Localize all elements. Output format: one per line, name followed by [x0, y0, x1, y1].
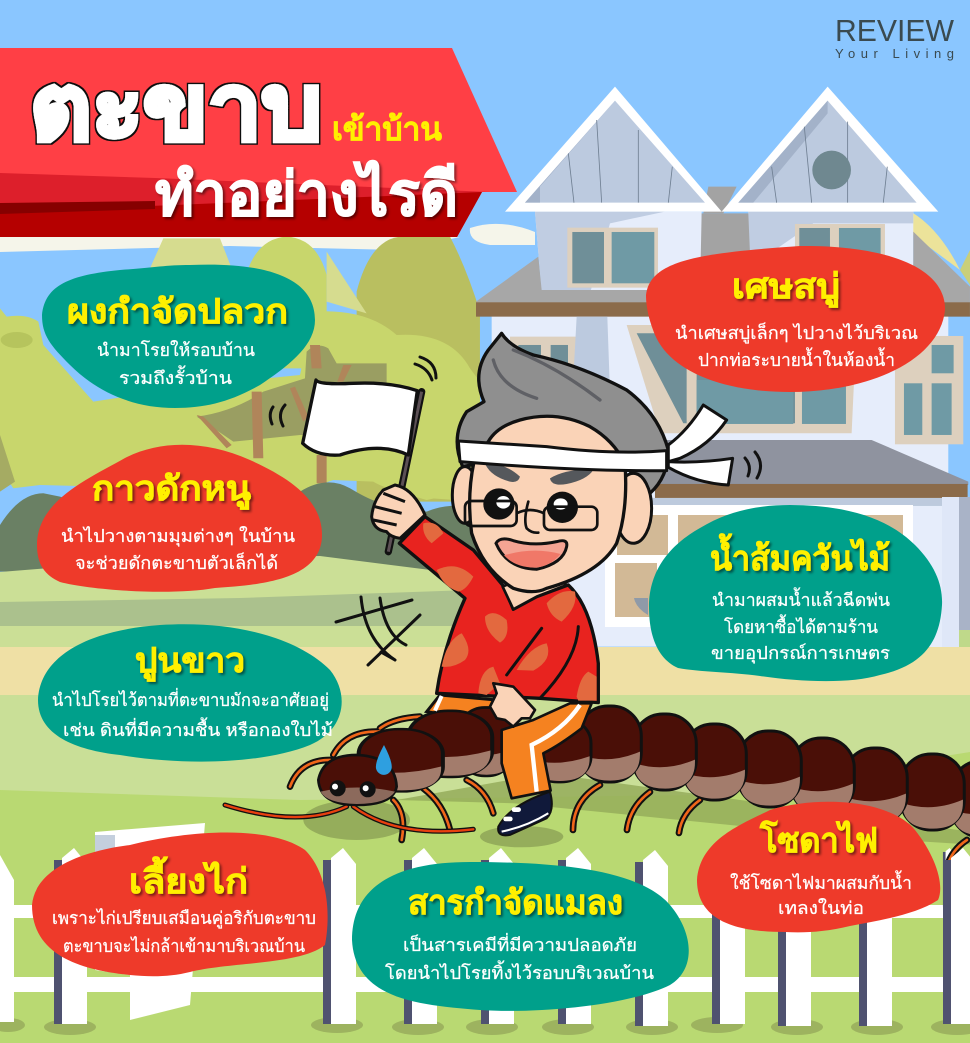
eyes — [483, 488, 515, 520]
bubble: โซดาไฟ: เทลงในท่อ — [778, 898, 864, 918]
bubble: สารกำจัดแมลง: เป็นสารเคมีที่มีความปลอดภัย — [403, 933, 637, 955]
gate — [95, 823, 205, 1020]
bubble: เลี้ยงไก่: เพราะไก่เปรียบเสมือนคู่อริกับตะขาบ — [52, 908, 316, 929]
bubble: เลี้ยงไก่: เลี้ยงไก่ — [129, 856, 248, 901]
shirt — [399, 517, 598, 703]
bubble: กาวดักหนู: จะช่วยดักตะขาบตัวเล็กได้ — [75, 552, 278, 573]
bubble: ผงกำจัดปลวก: ผงกำจัดปลวก — [67, 293, 288, 331]
ears — [452, 467, 652, 543]
fence posts — [0, 855, 14, 1022]
bubble: กาวดักหนู — [37, 445, 322, 592]
yellow trees right — [913, 213, 970, 285]
logo: Your Living — [835, 46, 954, 61]
title: ตะขาบ: ตะขาบ — [30, 57, 322, 159]
large window — [627, 325, 857, 433]
hills — [0, 482, 480, 572]
centipede body segments — [359, 706, 970, 837]
upper walls — [535, 212, 702, 293]
neck — [503, 570, 567, 609]
glasses — [465, 501, 597, 533]
upper windows — [567, 228, 658, 288]
bubble: สารกำจัดแมลง: สารกำจัดแมลง — [408, 884, 623, 922]
bubble: ผงกำจัดปลวก — [42, 265, 315, 408]
right fence post — [943, 848, 970, 1024]
title: เข้าบ้าน: เข้าบ้าน — [332, 111, 442, 147]
fence — [0, 823, 970, 1035]
background trees — [0, 237, 480, 502]
house — [476, 87, 970, 647]
bubble: น้ำส้มควันไม้ — [649, 505, 942, 681]
bubble: ผงกำจัดปลวก: นำมาโรยให้รอบบ้าน — [97, 340, 255, 360]
shoe — [498, 792, 552, 835]
bubble: กาวดักหนู: นำไปวางตามมุมต่างๆ ในบ้าน — [61, 526, 295, 547]
raised hand — [372, 485, 425, 538]
bubble: เศษสบู่: นำเศษสบู่เล็กๆ ไปวางไว้บริเวณ — [675, 322, 918, 344]
main roof — [476, 232, 970, 303]
left thigh — [427, 695, 497, 723]
title: ทำอย่างไรดี: ทำอย่างไรดี — [155, 159, 458, 228]
flag — [303, 380, 422, 552]
bubble: กาวดักหนู: กาวดักหนู — [92, 470, 251, 510]
bubble: น้ำส้มควันไม้: โดยหาซื้อได้ตามร้าน — [724, 614, 878, 637]
round vent — [812, 151, 851, 189]
leg and pants — [435, 696, 592, 798]
bubble: สารกำจัดแมลง — [352, 862, 689, 1011]
bubble: เลี้ยงไก่: ตะขาบจะไม่กล้าเข้ามาบริเวณบ้าน — [63, 936, 305, 956]
bubble: ปูนขาว — [38, 624, 342, 762]
right window — [895, 336, 963, 444]
fence rails — [0, 905, 970, 992]
centipede legs — [290, 717, 967, 867]
bubble: เลี้ยงไก่ — [32, 832, 328, 976]
sweat drop — [376, 745, 392, 775]
bubble: น้ำส้มควันไม้: น้ำส้มควันไม้ — [710, 533, 890, 578]
character and centipede — [225, 333, 970, 907]
motion and scratch marks — [270, 357, 761, 665]
bubble: ผงกำจัดปลวก: รวมถึงรั้วบ้าน — [119, 365, 232, 388]
title banner — [0, 48, 517, 237]
antennae — [225, 805, 473, 831]
bubble: ปูนขาว: ปูนขาว — [135, 642, 245, 682]
bubble: สารกำจัดแมลง: โดยนำไปโรยทิ้งไว้รอบบริเวณบ้าน — [385, 960, 654, 983]
bubble: เศษสบู่: เศษสบู่ — [732, 268, 840, 308]
logo: REVIEW — [835, 13, 955, 48]
lower walls — [492, 313, 948, 647]
centipede head — [318, 755, 397, 805]
bubble: น้ำส้มควันไม้: นำมาผสมน้ำแล้วฉีดพ่น — [712, 587, 890, 610]
ground bands — [0, 556, 970, 1043]
bubble: เศษสบู่ — [646, 246, 945, 392]
bubble: โซดาไฟ: ใช้โซดาไฟมาผสมกับน้ำ — [730, 870, 912, 893]
bubble: น้ำส้มควันไม้: ขายอุปกรณ์การเกษตร — [711, 643, 890, 664]
porch roof — [657, 440, 968, 485]
bubble: โซดาไฟ: โซดาไฟ — [759, 820, 878, 860]
window left small — [510, 337, 577, 367]
face — [465, 416, 626, 592]
post shadows — [0, 1017, 970, 1035]
roof gables — [505, 87, 722, 212]
right fence post over shadow — [943, 848, 954, 907]
bubble: ปูนขาว: นำไปโรยไว้ตามที่ตะขาบมักจะอาศัยอยู่ — [52, 688, 329, 711]
bubble: เศษสบู่: ปากท่อระบายน้ำในห้องน้ำ — [698, 347, 895, 370]
lower hand — [490, 683, 535, 727]
clouds — [0, 224, 535, 252]
mouth — [496, 539, 567, 569]
shadows on ground — [303, 800, 410, 840]
bubble: โซดาไฟ — [697, 802, 940, 932]
ground floor windows — [605, 497, 970, 647]
eyebrows — [486, 464, 520, 482]
headband — [458, 405, 733, 485]
bubble: ปูนขาว: เช่น ดินที่มีความชื้น หรือกองใบไม้ — [63, 717, 333, 740]
hair — [457, 333, 668, 493]
